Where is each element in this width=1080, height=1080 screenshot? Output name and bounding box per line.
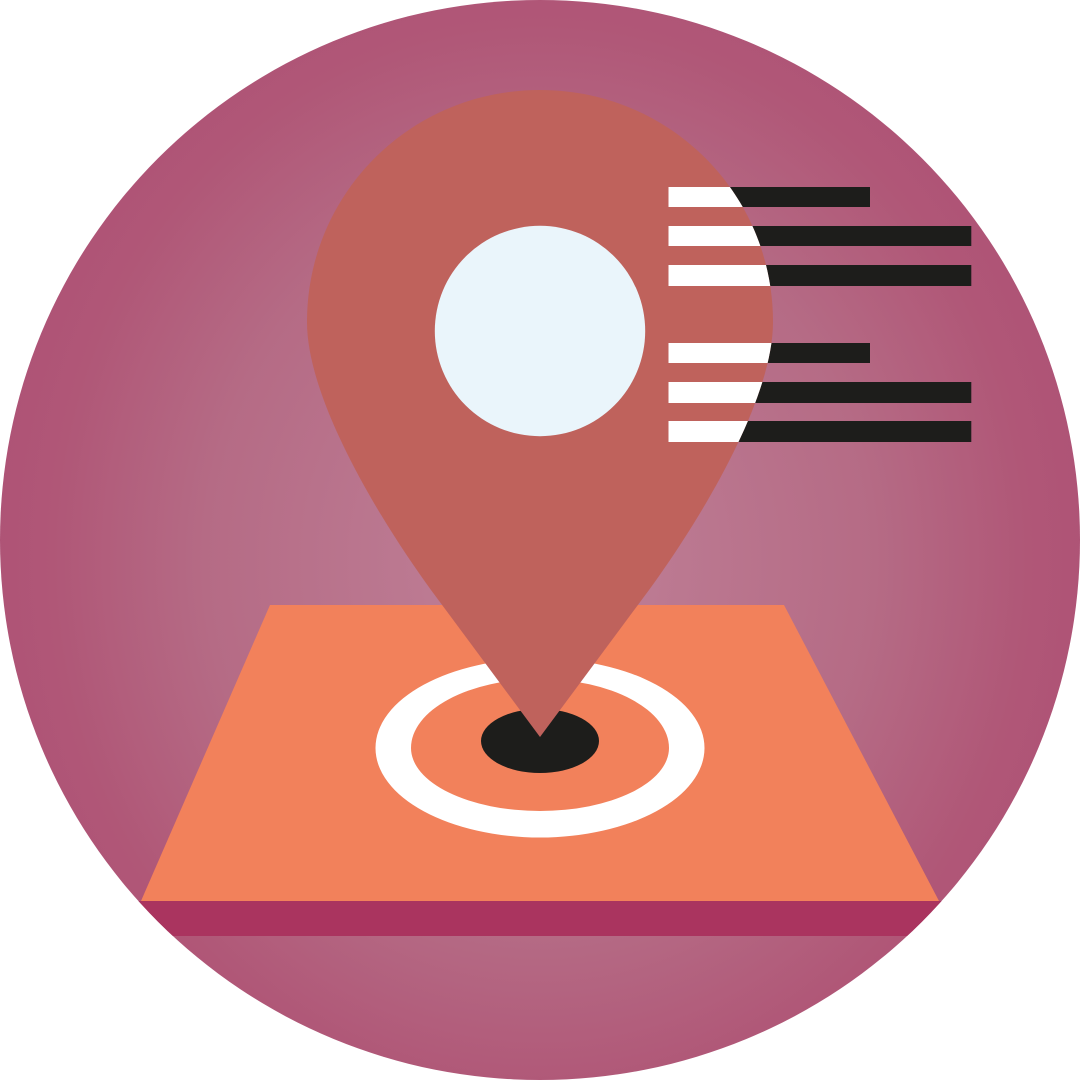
map base edge — [130, 901, 950, 936]
target rings — [376, 658, 704, 838]
outer white ring — [376, 658, 704, 838]
map plane — [141, 605, 939, 901]
center black spot — [481, 709, 599, 773]
pin hole — [435, 226, 645, 436]
location pin — [307, 90, 773, 737]
text lines: white segments over pin — [668, 187, 772, 442]
text lines: black bars — [668, 187, 971, 442]
